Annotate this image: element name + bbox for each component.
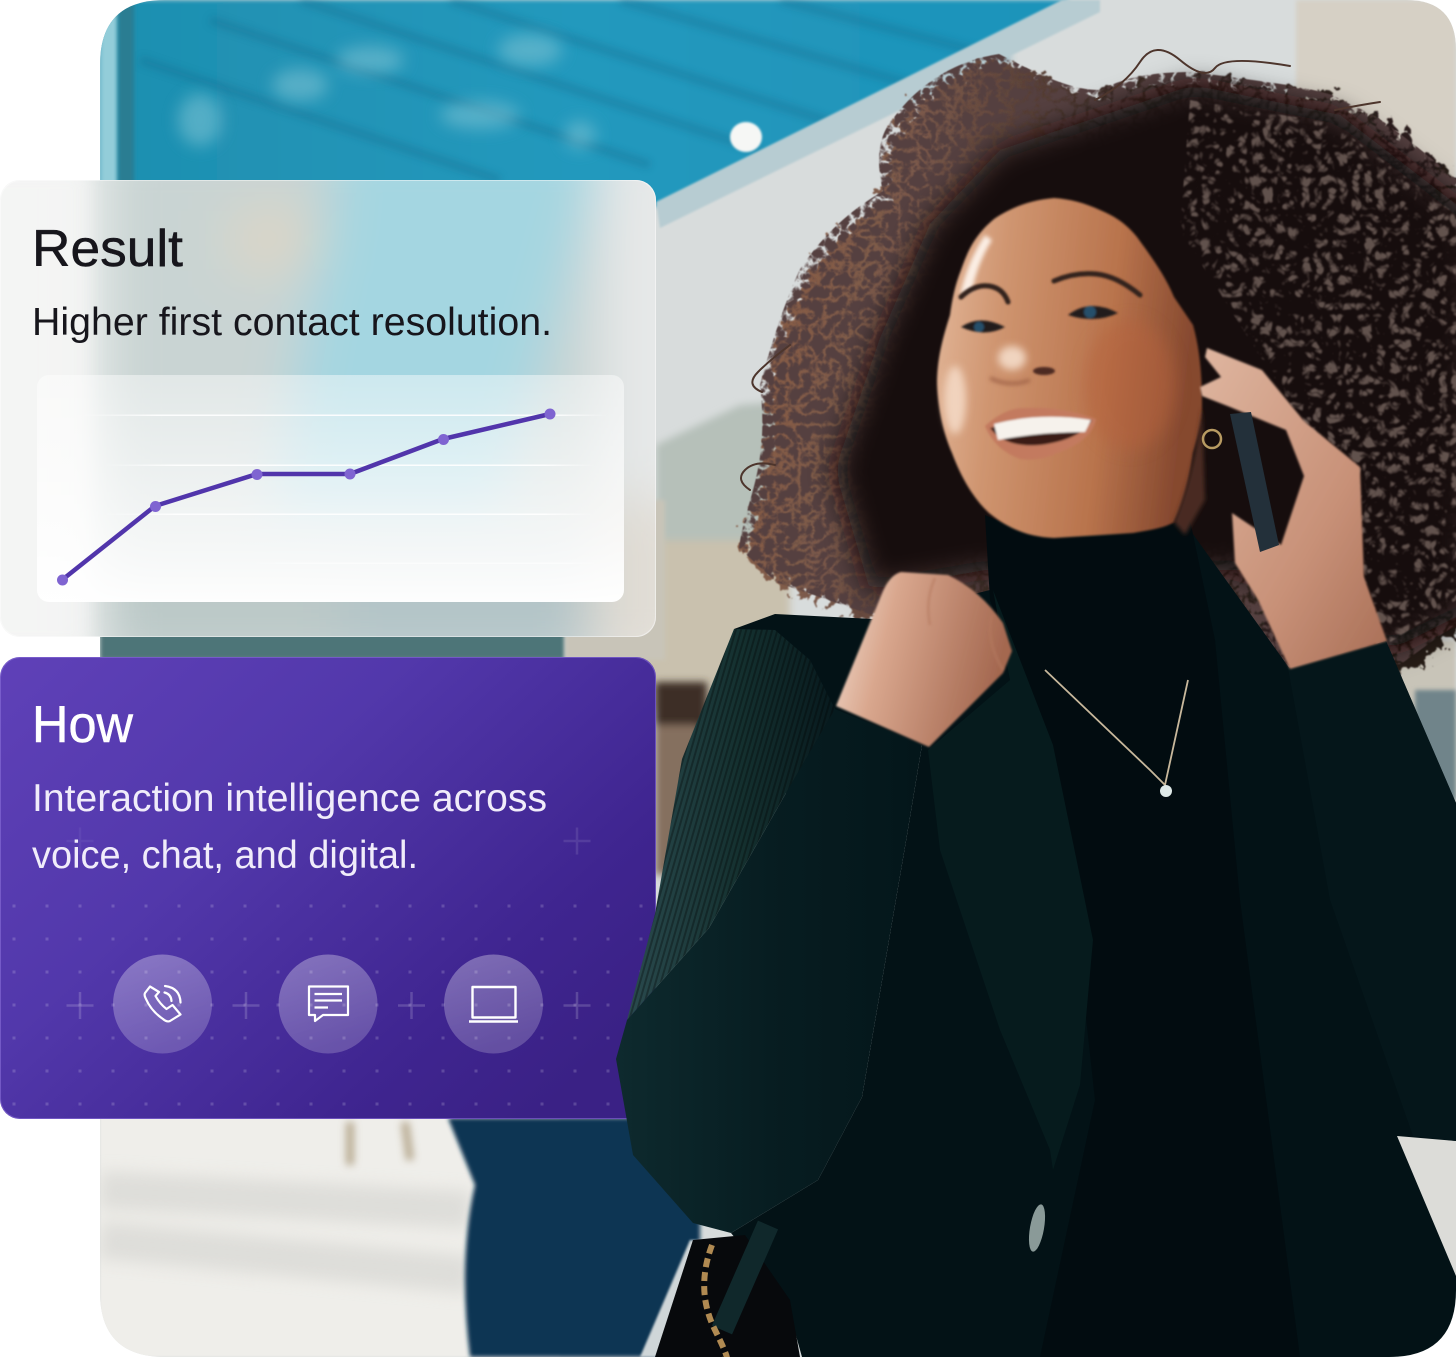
bag strap: [722, 1225, 768, 1330]
smile: [985, 408, 1096, 460]
fist: [836, 572, 1012, 747]
dark inner hair mass: [835, 85, 1456, 650]
chart points: [57, 408, 556, 586]
outer sunlit curls: [739, 54, 1456, 670]
bag chain: [704, 1245, 727, 1357]
necklace: [1045, 670, 1188, 785]
text: interaction intelligence: Interaction intelligence across: [32, 777, 547, 820]
icon: laptop: [444, 954, 543, 1054]
left cheek highlight: [944, 366, 966, 434]
face: [937, 198, 1221, 538]
jaw shadow: [1174, 407, 1205, 535]
turtleneck: [985, 515, 1193, 590]
lapel: [928, 590, 1093, 1170]
soft curls on the dark mass: [1180, 100, 1456, 650]
blue glass building: [100, 0, 1070, 210]
text: voice chat digital: voice, chat, and digital.: [32, 834, 418, 877]
photo subject: woman on the phone: [616, 50, 1456, 1357]
chart line: [62, 414, 550, 580]
panel: result: [1, 180, 656, 637]
right sleeve: [1288, 641, 1456, 1141]
curly hair: [739, 50, 1456, 670]
forehead highlight: [960, 235, 992, 295]
pale ground beside the bag: [639, 1238, 701, 1357]
heading: Result: Result: [32, 220, 184, 278]
distant person: [655, 682, 707, 875]
underside shadow: [656, 400, 776, 542]
stray curls: [741, 50, 1380, 490]
icon: phone: [113, 954, 212, 1054]
right cheek warm tone: [1085, 320, 1175, 450]
pendant: [1160, 785, 1172, 797]
teal strip behind the panels: [100, 637, 566, 657]
far wall: [1296, 0, 1456, 178]
text: higher first contact resolution: Higher first contact resolution.: [32, 301, 552, 344]
hand with phone: [1200, 348, 1387, 669]
nose: [990, 346, 1055, 384]
dark curl texture: [739, 54, 1456, 670]
phone: [1230, 412, 1279, 552]
jacket button: [1026, 1203, 1048, 1253]
beige columns: [640, 540, 790, 710]
far right background: [1400, 638, 1456, 802]
blurred legs: [350, 1122, 410, 1165]
line chart card: [37, 375, 624, 602]
eyebrows: [961, 274, 1140, 302]
dot grid: [12, 904, 642, 1106]
pavement: [100, 1119, 475, 1357]
eyes: [961, 306, 1118, 332]
ceiling light: [730, 122, 762, 152]
connector plus signs: [66, 828, 590, 1019]
earring: [1203, 430, 1221, 448]
jacket body: [731, 530, 1456, 1357]
navy passer-by: [448, 1118, 700, 1357]
upper arm, ribbed: [627, 629, 835, 1020]
frosted glass background: [1, 180, 656, 637]
panel: how: [0, 657, 656, 1119]
panel border: [0, 658, 656, 1118]
icon: chat bubble: [278, 954, 378, 1054]
roof edge band: [656, 0, 1100, 228]
heading: How: How: [32, 696, 133, 754]
forearm sleeve: [616, 709, 922, 1233]
panel border: [0, 180, 656, 636]
purple panel background: [0, 657, 656, 1119]
far right pavement: [1397, 1136, 1456, 1162]
bag: [655, 1235, 800, 1357]
